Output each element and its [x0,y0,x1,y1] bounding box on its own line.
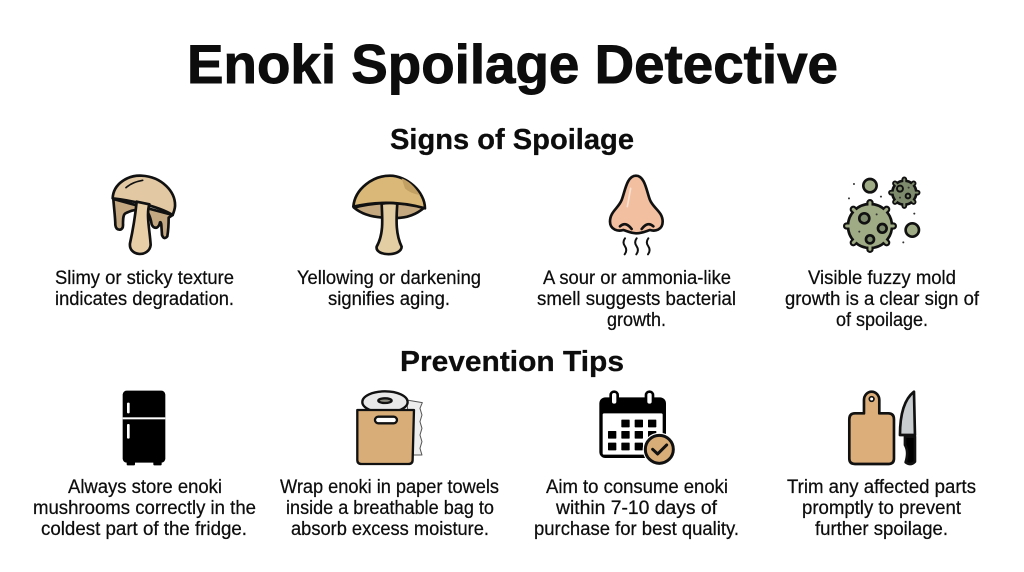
icon: yellowed mushroom [353,176,425,254]
text: smell: A sour or ammonia-like [543,267,731,289]
panel: slimy texture [55,176,234,310]
heading: prevention tips: Prevention Tips [400,346,624,378]
panel: yellowing [297,176,481,310]
text: fridge: Always store enoki [68,476,222,498]
text: smell: smell suggests bacterial [537,288,736,310]
text: mold: of spoilage. [836,309,928,331]
panel: paper towels [280,391,499,540]
text: smell: growth. [607,309,666,331]
icon: calendar with check [599,392,676,466]
text: slimy [55,267,234,310]
icon: fridge [123,391,165,465]
text: paper towels [280,476,499,540]
text: slimy: indicates degradation. [55,288,234,310]
text: fridge [33,476,256,540]
icon: paper towel and bag [357,391,422,464]
text: mold: Visible fuzzy mold [808,267,956,289]
text: fridge: coldest part of the fridge. [41,518,247,540]
text: consume timing [534,476,739,540]
panel: smell [537,176,736,331]
text: mold: growth is a clear sign of [785,288,980,310]
text: consume timing: purchase for best quality. [534,518,739,540]
text: smell [537,267,736,331]
text: mold [785,267,980,331]
text: yellowing: Yellowing or darkening [297,267,481,289]
panel: trim [787,392,976,540]
text: slimy: Slimy or sticky texture [55,267,234,289]
icon: slimy mushroom [113,176,175,254]
text: yellowing: signifies aging. [328,288,450,310]
text: paper towels: absorb excess moisture. [291,518,489,540]
text: trim: promptly to prevent [802,497,962,519]
heading: signs of spoilage: Signs of Spoilage [390,124,634,156]
text: paper towels: inside a breathable bag to [286,497,494,519]
text: yellowing [297,267,481,310]
text: consume timing: within 7-10 days of [555,497,718,519]
text: trim [787,476,976,540]
panel: mold [785,179,980,331]
icon: cutting board and knife [849,392,915,464]
text: trim: further spoilage. [815,518,948,540]
text: consume timing: Aim to consume enoki [546,476,728,498]
icon: mold spores [847,179,919,249]
text: fridge: mushrooms correctly in the [33,497,256,519]
text: paper towels: Wrap enoki in paper towels [280,476,499,498]
panel: fridge [33,391,256,540]
title: Enoki Spoilage Detective [187,33,838,95]
icon: nose [610,176,663,254]
text: trim: Trim any affected parts [787,476,976,498]
panel: consume timing [534,392,739,540]
